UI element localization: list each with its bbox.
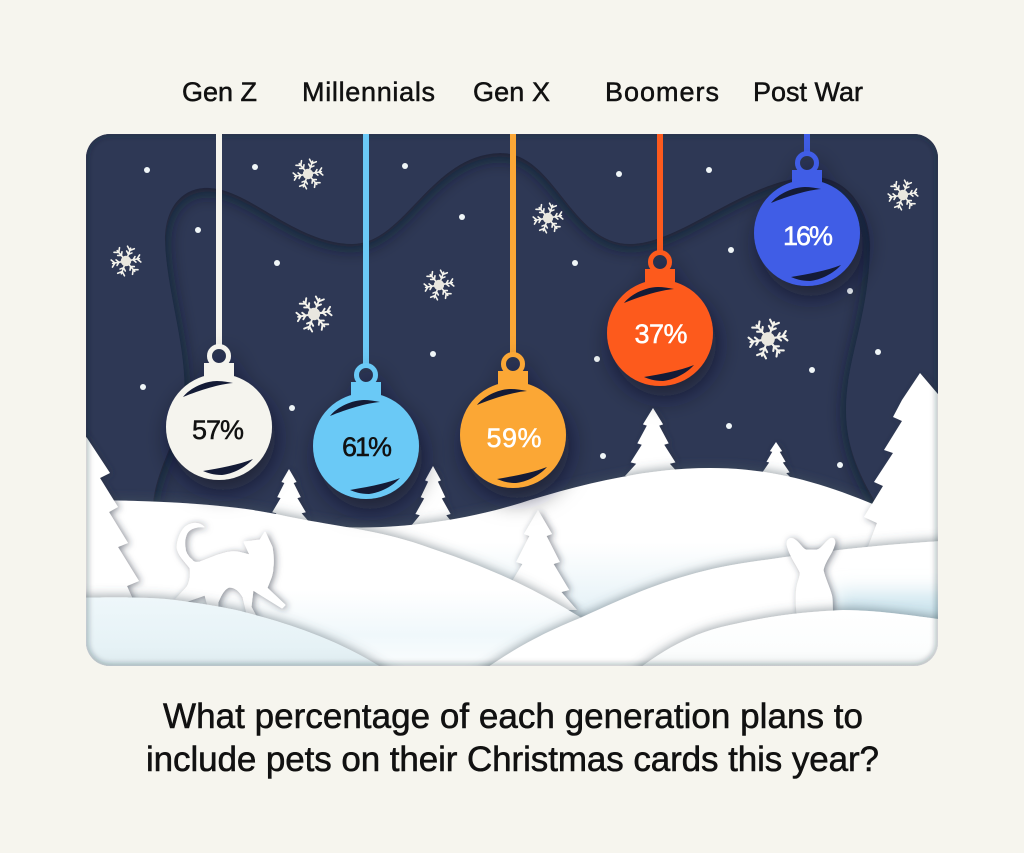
small trees on the horizon (268, 408, 793, 526)
big right tree (863, 373, 938, 547)
cat silhouette (175, 523, 285, 618)
ornament: Gen Z 57% (166, 134, 272, 480)
back snow hill (340, 468, 960, 680)
mid right snow hill (477, 533, 938, 666)
ornament: Millennials 61%: 61% (342, 432, 392, 462)
ornament: Post War 16% (754, 134, 860, 286)
snow dots (140, 163, 881, 468)
left snow hill (86, 498, 588, 666)
big left tree (86, 437, 144, 598)
panel edge shading (86, 134, 938, 666)
generation labels (182, 77, 863, 107)
ornament: Gen X 59% (460, 134, 566, 488)
rabbit silhouette (787, 538, 835, 625)
label: Post War: Post War (753, 77, 863, 107)
label: Boomers: Boomers (605, 77, 719, 107)
ornament: Gen Z 57%: 57% (192, 415, 244, 445)
snowflakes (108, 156, 921, 363)
night sky base (86, 134, 938, 666)
front left snow hill (86, 589, 392, 666)
ornament: Boomers 37%: 37% (634, 319, 688, 349)
sky layer with wavy cut-out (86, 134, 938, 504)
label: Gen X: Gen X (473, 77, 550, 107)
front right snow hill (631, 602, 938, 666)
ornament: Millennials 61% (313, 134, 419, 499)
ornament: Gen X 59%: 59% (486, 423, 542, 453)
ornament: Boomers 37% (607, 134, 713, 386)
title question (146, 697, 879, 779)
panel: winter paper-cut scene (86, 134, 938, 666)
label: Gen Z: Gen Z (182, 77, 257, 107)
title question: What percentage of each generation plans to (163, 697, 863, 736)
title question: include pets on their Christmas cards this year? (146, 740, 879, 779)
label: Millennials: Millennials (302, 77, 435, 107)
ornament: Post War 16%: 16% (783, 221, 833, 251)
middle tree (499, 510, 577, 610)
